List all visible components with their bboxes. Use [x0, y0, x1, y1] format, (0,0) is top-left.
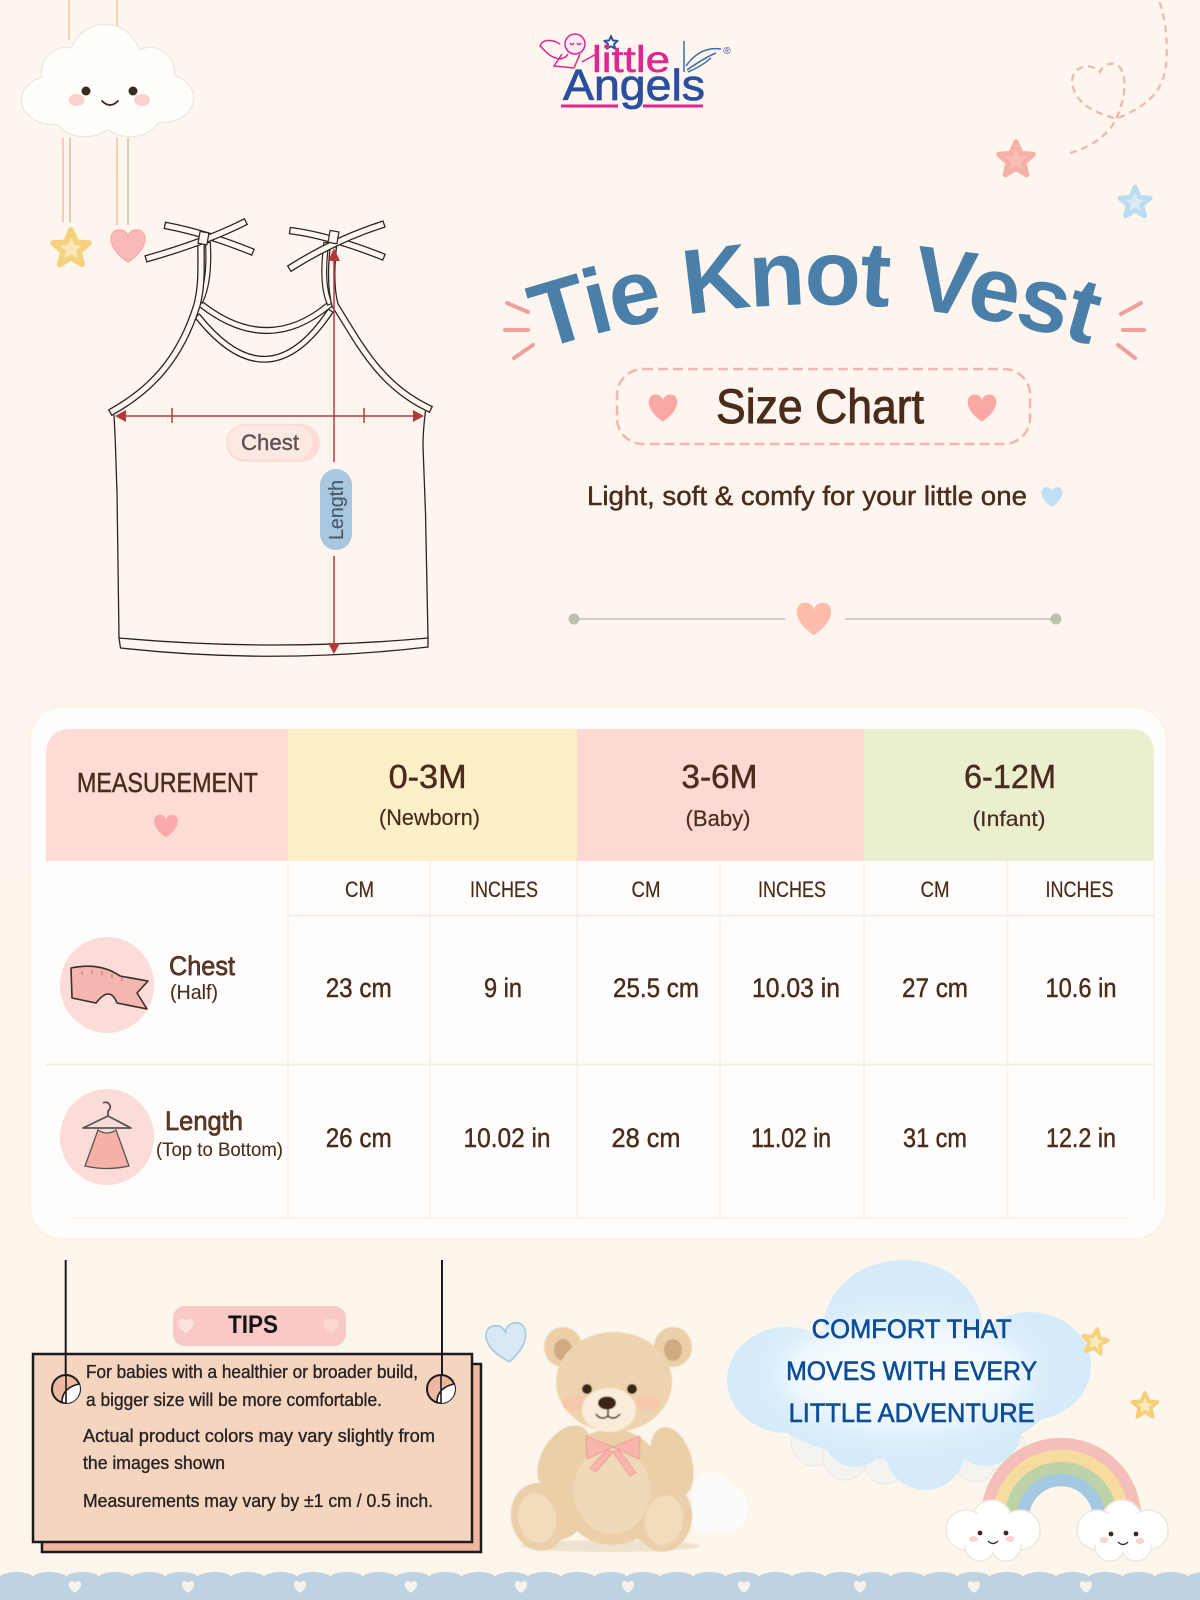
- length label: Length: [165, 1106, 243, 1136]
- header: 0-3M: [288, 729, 577, 861]
- heart divider: [568, 603, 1062, 635]
- tips back card: [42, 1364, 481, 1552]
- length values: 26 cm: [326, 1123, 392, 1153]
- right bow: [292, 225, 381, 267]
- header: 6-12M: 6-12M: [964, 758, 1056, 795]
- chest values: 27 cm: [902, 973, 968, 1003]
- icon: pink star: [999, 142, 1033, 175]
- length values: 12.2 in: [1046, 1123, 1116, 1153]
- icon: measuring tape: [60, 937, 154, 1033]
- tips heading pill: TIPS: [228, 1311, 278, 1339]
- illustration: teddy bear: [506, 1327, 701, 1556]
- logo: Little Angels: [540, 34, 731, 110]
- length label: Length: [326, 480, 348, 540]
- icon: star wand: [604, 36, 618, 49]
- title: Tie Knot Vest: [524, 244, 1102, 344]
- unit header row: INCHES: [470, 877, 538, 902]
- slogan text: COMFORT THAT: [812, 1314, 1012, 1344]
- length values: [326, 1123, 1116, 1153]
- tagline: Light, soft & comfy for your little one: [587, 481, 1027, 511]
- right grommet: [427, 1375, 455, 1403]
- illustration: rainbow: [987, 1444, 1135, 1518]
- chest values: 10.6 in: [1046, 973, 1116, 1003]
- length values: 10.02 in: [464, 1123, 550, 1153]
- size chart badge: [617, 369, 1030, 444]
- title: [524, 244, 1102, 344]
- tips text: [83, 1362, 435, 1511]
- chest values: 25.5 cm: [613, 973, 699, 1003]
- bear bow tie: [586, 1436, 640, 1476]
- chest measure arrow: [115, 408, 424, 423]
- header: 0-3M: 0-3M: [389, 758, 467, 795]
- size chart label: Size Chart: [716, 381, 924, 434]
- table grid: [46, 861, 1154, 1218]
- icon: blue star: [1120, 187, 1150, 216]
- tips front card: [33, 1354, 472, 1542]
- unit header row: [345, 877, 1114, 902]
- logo underline: [561, 104, 703, 108]
- length label: [320, 469, 352, 550]
- length measure arrow: [328, 248, 340, 654]
- shoulder straps: [113, 245, 428, 411]
- registered mark: ®: [723, 46, 731, 57]
- chest values: [326, 973, 1116, 1003]
- icon: small blue heart: [1042, 487, 1062, 507]
- header: measurement: MEASUREMENT: [77, 767, 258, 798]
- tips text: Actual product colors may vary slightly from: [83, 1426, 435, 1446]
- header: 0-3M: (Newborn): [379, 805, 480, 830]
- panel: tips: [33, 1260, 481, 1552]
- chest values: 10.03 in: [752, 973, 840, 1003]
- header: measurement: [46, 729, 288, 861]
- hanging strings: [66, 1260, 442, 1392]
- row: chest: [60, 937, 1116, 1033]
- unit header row: CM: [632, 877, 660, 902]
- icon: smiling cloud: [22, 25, 193, 136]
- neckline bands: [199, 305, 329, 359]
- vest hem: [119, 638, 428, 656]
- icon: hanging heart: [111, 230, 145, 262]
- decorative dashed heart swirl: [1070, 2, 1167, 153]
- tips text: a bigger size will be more comfortable.: [86, 1390, 382, 1410]
- length note: (Top to Bottom): [156, 1140, 283, 1161]
- left bow: [149, 223, 250, 258]
- tips text: the images shown: [83, 1453, 225, 1473]
- tips text: Measurements may vary by ±1 cm / 0.5 inch.: [83, 1491, 433, 1511]
- bottom scalloped band: [0, 1572, 1200, 1600]
- chest label: Chest: [241, 430, 299, 455]
- logo word: Angels: Angels: [563, 61, 705, 110]
- unit header row: CM: [345, 877, 374, 902]
- illustration: left smiling cloud: [946, 1500, 1040, 1561]
- icon: heart left: [649, 394, 677, 422]
- vest body outline: [114, 411, 428, 638]
- tips heading pill: [173, 1306, 346, 1346]
- length values: 28 cm: [612, 1123, 680, 1153]
- small cloud behind bear: [688, 1472, 748, 1533]
- header: 3-6M: (Baby): [686, 806, 750, 831]
- icon: hanging star: [53, 230, 89, 264]
- icon: blue heart: [485, 1322, 529, 1364]
- chest label: Chest: [169, 951, 235, 981]
- header: 3-6M: [577, 729, 864, 861]
- panel: size table: [30, 707, 1166, 1239]
- chest note: (Half): [170, 982, 218, 1004]
- chest values: 9 in: [484, 973, 522, 1003]
- title spark marks: [505, 303, 1144, 358]
- unit header row: INCHES: [1046, 877, 1114, 902]
- icon: dress on hanger: [60, 1089, 154, 1185]
- header: 6-12M: (Infant): [972, 808, 1046, 831]
- slogan cloud: [727, 1260, 1091, 1490]
- icon: yellow star right of cloud: [1081, 1327, 1109, 1355]
- icon: blue wing: [684, 41, 721, 72]
- length values: 11.02 in: [751, 1123, 831, 1153]
- chest label: [226, 424, 320, 462]
- icon: heart right: [968, 394, 996, 422]
- table card: [30, 707, 1166, 1239]
- hanging cloud mobile: [22, 0, 193, 264]
- garment diagram: tie knot vest: [113, 223, 428, 656]
- unit header row: CM: [920, 877, 950, 902]
- unit header row: INCHES: [758, 877, 826, 902]
- row: length: [60, 1089, 1116, 1185]
- slogan text: MOVES WITH EVERY: [786, 1356, 1037, 1386]
- left grommet: [52, 1375, 80, 1403]
- header: 6-12M: [864, 729, 1154, 861]
- icon: yellow star far right: [1133, 1393, 1157, 1417]
- illustration: right smiling cloud: [1077, 1500, 1168, 1561]
- under cloud: [791, 1418, 1027, 1484]
- slogan text: LITTLE ADVENTURE: [789, 1398, 1035, 1428]
- tips text: For babies with a healthier or broader build,: [86, 1362, 418, 1382]
- chest values: 23 cm: [326, 973, 392, 1003]
- slogan text: [786, 1314, 1037, 1428]
- icon: angel: [540, 34, 598, 68]
- length values: 31 cm: [903, 1123, 967, 1153]
- logo word: little: little: [592, 39, 670, 80]
- header: 3-6M: 3-6M: [681, 758, 757, 795]
